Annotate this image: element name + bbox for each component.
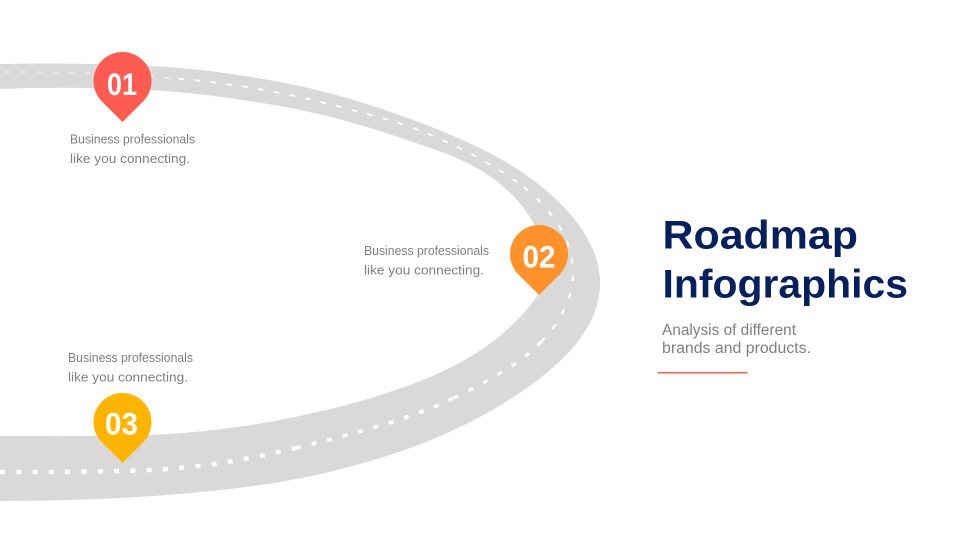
title: Roadmap — [662, 214, 858, 258]
pin 03: 03 — [105, 406, 138, 442]
caption 01 — [70, 132, 195, 166]
caption 02: like you connecting. — [364, 262, 484, 278]
curved road — [0, 64, 600, 501]
caption 02: Business professionals — [364, 243, 489, 258]
pin 02 — [510, 225, 568, 295]
lane dashes: far section — [170, 78, 517, 182]
caption 03 — [68, 350, 193, 384]
lane dashes: faint far end — [0, 72, 170, 78]
subtitle: brands and products. — [662, 340, 811, 357]
caption 03: like you connecting. — [68, 370, 188, 384]
pin 01: 01 — [107, 66, 137, 102]
lane dashes: bend — [517, 182, 573, 342]
pin 03 — [94, 393, 152, 463]
lane dashes: near section — [0, 448, 296, 472]
accent line — [658, 372, 748, 374]
caption 01: Business professionals — [70, 132, 195, 146]
pin 01 — [94, 52, 152, 122]
subtitle — [662, 322, 811, 357]
caption 03: Business professionals — [68, 350, 193, 365]
lane dashes: lower bend — [454, 342, 541, 398]
road surface — [0, 64, 600, 501]
pin 02: 02 — [522, 238, 556, 274]
title — [662, 214, 908, 306]
subtitle: Analysis of different — [662, 322, 797, 339]
lane dashes: middle section — [296, 398, 454, 448]
title: Infographics — [662, 262, 908, 306]
caption 02 — [364, 243, 489, 278]
caption 01: like you connecting. — [70, 151, 190, 166]
